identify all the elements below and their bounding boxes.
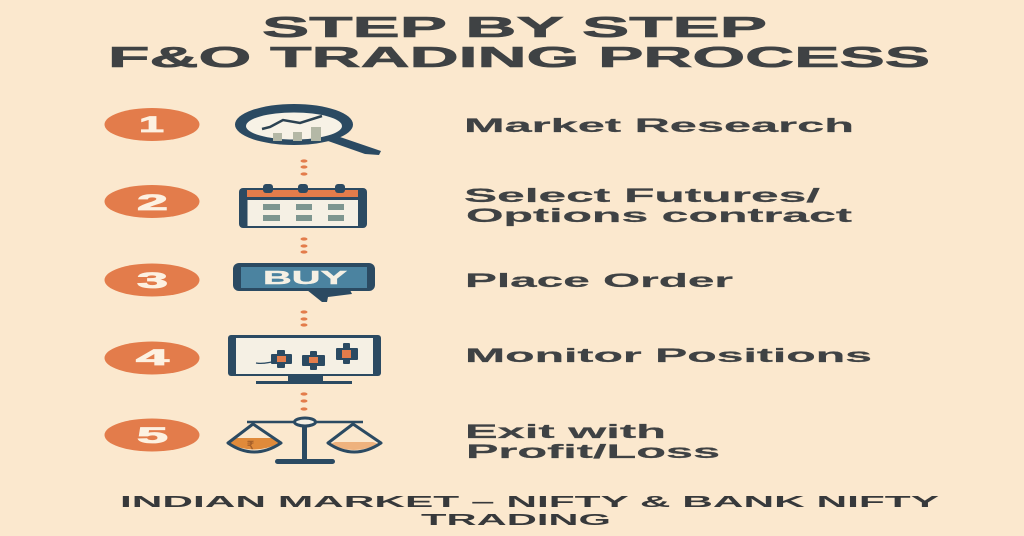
step 1 number badge: 1: [139, 112, 164, 137]
step 3 number badge: [104, 264, 200, 296]
step 4 number badge: 4: [136, 345, 171, 370]
step 5 number badge: [104, 418, 200, 452]
step 1 number badge: [104, 108, 200, 141]
title: STEP BY STEP: [262, 12, 767, 44]
step 2 number badge: [104, 185, 200, 218]
connector 3: [300, 310, 308, 327]
step 4 label: Monitor Positions: [465, 346, 872, 367]
step 1 label: Market Research: [464, 116, 854, 137]
step 2 label: [464, 186, 854, 227]
connector 2: [300, 237, 308, 254]
icon: balance scale: ₹: [247, 440, 254, 452]
step 5 label: Profit/Loss: [466, 442, 720, 463]
step 2 number badge: 2: [137, 190, 168, 215]
step 5 label: [465, 422, 720, 463]
step 4 number badge: [104, 342, 200, 374]
step 2 label: Options contract: [466, 206, 854, 227]
footer text: INDIAN MARKET – NIFTY & BANK NIFTY: [120, 494, 940, 511]
icon: buy button: BUY: [263, 268, 347, 288]
step 5 number badge: 5: [137, 423, 168, 448]
connector 1: [300, 159, 308, 176]
title: F&O TRADING PROCESS: [108, 42, 930, 74]
icon: magnifying glass with chart: [235, 104, 381, 155]
icon: calendar: [239, 184, 367, 228]
footer text: [120, 494, 940, 529]
title: [108, 12, 930, 74]
icon: buy button: [233, 263, 375, 302]
footer text: TRADING: [421, 512, 611, 529]
connector 4: [300, 392, 308, 411]
step 3 number badge: 3: [137, 268, 168, 293]
step 3 label: Place Order: [465, 271, 735, 292]
step 2 label: Select Futures/: [464, 186, 822, 207]
icon: monitor with candlesticks: [228, 335, 381, 384]
step 5 label: Exit with: [465, 422, 666, 443]
icon: balance scale: [228, 418, 381, 464]
